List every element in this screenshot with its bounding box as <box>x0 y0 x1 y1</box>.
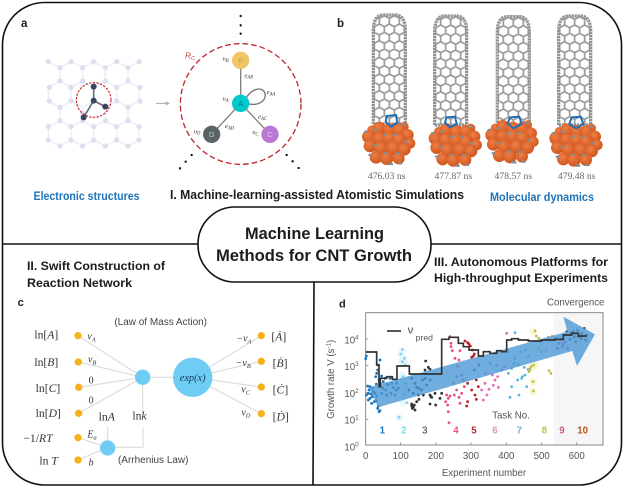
weight labels: B <box>92 359 96 366</box>
axis tick labels: 10 <box>344 416 355 427</box>
panel d: growth rate chart <box>326 298 604 479</box>
time labels: 477.87 ns <box>435 171 472 182</box>
predicted growth line <box>366 333 587 387</box>
weight labels: C <box>246 390 251 397</box>
weight labels: 0 <box>89 376 94 387</box>
axis tick labels: 0 <box>363 451 368 462</box>
graphene lattice <box>48 62 140 146</box>
weight labels: E <box>87 429 93 440</box>
network edges <box>78 336 261 460</box>
task labels: 8 <box>542 425 548 436</box>
legend: pred <box>416 332 433 342</box>
blue caption: molecular dynamics: Molecular dynamics <box>490 192 594 204</box>
task labels: 6 <box>492 425 498 436</box>
central title box: Methods for CNT Growth <box>216 246 412 265</box>
axis tick labels: 0 <box>355 441 359 448</box>
input labels: ln[C] <box>36 382 60 395</box>
axis tick labels: 10 <box>344 442 355 453</box>
atomic graph <box>180 16 301 168</box>
time labels: 478.57 ns <box>495 171 532 182</box>
heading I: I. Machine-learning-assisted Atomistic Simulations <box>170 187 464 202</box>
panel d: growth rate chart: ) <box>326 340 337 343</box>
task labels: 3 <box>422 425 427 436</box>
task labels: 5 <box>471 425 477 436</box>
input labels <box>23 328 147 467</box>
trend arrow <box>368 317 595 407</box>
task labels: 1 <box>380 425 386 436</box>
weight labels: B <box>247 363 251 370</box>
blue caption: electronic structures: Electronic structures <box>34 191 140 203</box>
weight labels: v <box>87 332 92 343</box>
atomic graph: R <box>185 50 191 60</box>
plot frame and ticks <box>366 313 603 445</box>
axis tick labels: 10 <box>344 389 355 400</box>
heading III: High-throughput Experiments <box>434 271 608 285</box>
axis tick labels: 200 <box>428 451 444 462</box>
legend <box>387 324 433 342</box>
weight labels: D <box>245 412 251 419</box>
panel b: molecular dynamics snapshots <box>362 15 603 182</box>
weight labels: −v <box>236 358 247 369</box>
scatter points by task <box>366 328 587 423</box>
atomic graph: e <box>267 89 270 96</box>
task labels: 7 <box>517 425 522 436</box>
task labels: 10 <box>577 425 588 436</box>
axis tick labels: 4 <box>355 334 359 341</box>
atomic graph: D <box>196 132 201 137</box>
weight labels: a <box>93 434 97 441</box>
weight labels: −v <box>236 333 248 344</box>
atomic graph: υ <box>223 96 226 103</box>
input labels: lnk <box>132 409 147 422</box>
atomic graph: AC <box>260 117 268 122</box>
panel c label: c <box>18 297 24 309</box>
nanotube snapshot 3 <box>485 17 539 163</box>
input labels: ln T <box>39 454 59 467</box>
atomic graph: AA <box>269 92 275 97</box>
highlighted atom cluster <box>76 83 111 120</box>
network nodes <box>78 336 261 460</box>
weight labels: 0 <box>89 396 94 407</box>
atomic graph: C <box>267 130 273 139</box>
weight labels: A <box>91 337 96 344</box>
axis tick labels <box>344 334 585 462</box>
heading III: III. Autonomous Platforms for <box>434 255 608 269</box>
heading II: Reaction Network <box>27 276 132 290</box>
time labels: 476.03 ns <box>368 171 406 182</box>
law captions: (Law of Mass Action) <box>114 317 207 328</box>
panel d: growth rate chart: -1 <box>326 343 333 349</box>
weight labels: b <box>89 457 94 468</box>
heading II <box>27 259 166 290</box>
heading III <box>434 255 608 285</box>
panel a label: a <box>21 18 28 30</box>
weight labels: A <box>247 338 252 345</box>
arrow <box>156 102 169 105</box>
task labels <box>380 411 588 436</box>
axis tick labels: 10 <box>344 362 355 373</box>
output labels: [Ḋ] <box>273 409 289 423</box>
task labels: 4 <box>453 425 459 436</box>
atomic graph: C <box>191 56 196 62</box>
convergence shading <box>554 313 603 445</box>
atomic graph: B <box>238 56 243 65</box>
panel c: reaction network <box>18 297 289 468</box>
atomic graph: υ <box>194 128 197 135</box>
axis tick labels: 100 <box>393 451 409 462</box>
nanotube snapshot 4 <box>549 16 603 167</box>
weight labels <box>86 332 252 468</box>
time labels: 479.48 ns <box>558 171 596 182</box>
axis tick labels: 500 <box>534 451 550 462</box>
atomic graph: A <box>238 99 243 108</box>
axis tick labels: 2 <box>355 388 359 395</box>
atomic graph: AB <box>246 76 253 81</box>
legend: ν <box>408 324 414 336</box>
panel b label: b <box>337 18 344 30</box>
atomic graph: B <box>226 59 229 64</box>
axis tick labels: 300 <box>463 451 479 462</box>
time labels <box>368 171 596 182</box>
atomic graph: υ <box>223 56 226 63</box>
panel c: reaction network: (Arrhenius Law) <box>118 455 188 466</box>
nanotube snapshot 2 <box>429 16 482 167</box>
panel d: growth rate chart: Growth rate V (s <box>326 349 337 419</box>
panel a: electronic structures and atomic graph <box>48 16 301 168</box>
input labels: ln[A] <box>34 328 58 341</box>
output labels: [Ḃ] <box>273 356 288 370</box>
atomic graph: D <box>209 130 214 139</box>
task labels: 2 <box>401 425 406 436</box>
atomic graph: e <box>244 72 247 79</box>
convergence label: Convergence <box>547 298 604 309</box>
weight labels: v <box>241 385 246 396</box>
output labels: [Ȧ] <box>271 329 286 343</box>
output labels <box>271 329 289 423</box>
weight labels: v <box>241 407 246 418</box>
atomic graph: AD <box>227 126 235 131</box>
heading II: II. Swift Construction of <box>27 259 166 273</box>
atomic graph: e <box>225 123 228 130</box>
atomic graph: C <box>255 132 259 137</box>
atomic graph: A <box>225 99 229 104</box>
exp label: exp(x) <box>180 373 206 384</box>
axis tick labels: 1 <box>355 415 359 422</box>
central title box <box>198 207 431 282</box>
axis titles: Experiment number <box>442 468 527 479</box>
task labels: Task No. <box>492 411 530 422</box>
axis tick labels: 3 <box>355 361 359 368</box>
axis tick labels: 400 <box>498 451 514 462</box>
input labels: −1/RT <box>23 432 54 445</box>
weight labels: v <box>88 354 92 365</box>
central title box: Machine Learning <box>245 224 384 243</box>
input labels: ln[D] <box>36 407 61 420</box>
task labels: 9 <box>559 425 565 436</box>
atomic graph: υ <box>252 129 255 136</box>
input labels: lnA <box>99 411 116 424</box>
atomic graph: e <box>258 114 261 121</box>
axis tick labels: 10 <box>344 335 355 346</box>
axis tick labels: 600 <box>569 451 585 462</box>
panel d label: d <box>339 299 346 311</box>
nanotube snapshot 1 <box>362 15 415 165</box>
input labels: ln[B] <box>34 356 58 369</box>
output labels: [Ċ] <box>273 382 288 397</box>
